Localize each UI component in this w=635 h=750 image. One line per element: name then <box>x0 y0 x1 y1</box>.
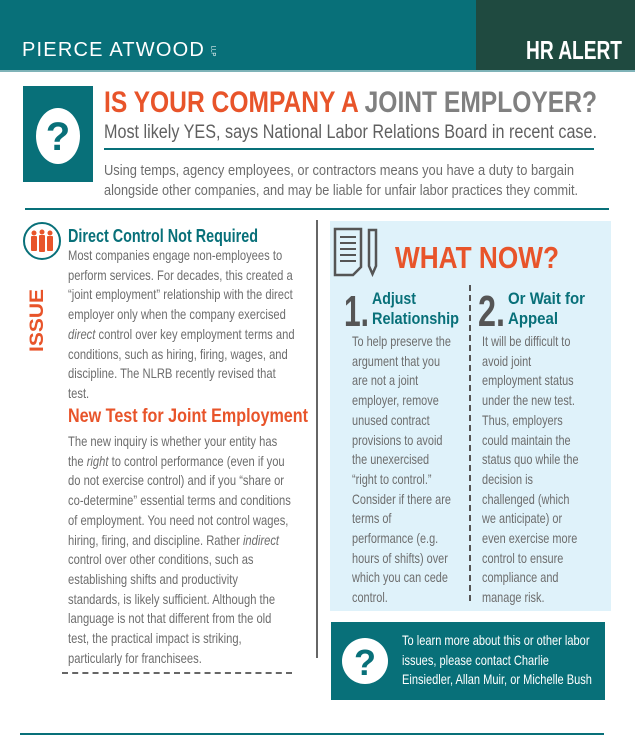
text: step 1: To help preserve the <box>352 333 451 349</box>
title <box>104 86 597 143</box>
icon: document and pen <box>334 228 378 277</box>
text: new test: standards, is likely sufficient. Although the <box>68 591 275 607</box>
text: direct control: employer only when the company exercised <box>68 306 286 322</box>
text: step 1: terms of <box>352 510 391 526</box>
text: new test: control over other conditions, such as <box>68 551 254 567</box>
text: step 1 <box>352 333 451 605</box>
text: step 2: Thus, employers <box>482 412 563 428</box>
text: new test: co-determine” essential terms and conditions <box>68 492 291 508</box>
callout: contact: To learn more about this or other labor <box>402 632 590 648</box>
text: new test <box>68 433 291 666</box>
text: direct control: conditions, such as hiring, firing, wages, and <box>68 346 288 362</box>
text: step 1: which you can cede <box>352 569 448 585</box>
text: new test: particularly for franchisees. <box>68 650 202 666</box>
text: step 1: provisions to avoid <box>352 432 442 448</box>
text: new test: do not exercise control) and if you “share or <box>68 472 284 488</box>
text: new test: establishing shifts and productivity <box>68 571 238 587</box>
text: direct control: discipline. The NLRB recently revised that <box>68 365 276 381</box>
text: step 1: the unexercised <box>352 451 429 467</box>
text: direct control <box>68 247 295 401</box>
step 2 heading: Or Wait for <box>508 289 585 308</box>
text: step 2: decision is <box>482 471 533 487</box>
callout: contact: Einsiedler, Allan Muir, or Michelle Bush <box>402 671 592 687</box>
text: direct control: perform services. For decades, this created a <box>68 267 293 283</box>
text: step 2: compliance and <box>482 569 558 585</box>
text: direct control: test. <box>68 385 89 401</box>
text: step 2: control to ensure <box>482 550 563 566</box>
text: step 2: status quo while the <box>482 451 579 467</box>
text: step 2: could maintain the <box>482 432 571 448</box>
text: step 1: unused contract <box>352 412 430 428</box>
step 2 heading <box>478 287 585 331</box>
icon: question circle <box>342 638 388 684</box>
text: step 1: hours of shifts) over <box>352 550 448 566</box>
text: step 2: It will be difficult to <box>482 333 570 349</box>
text: new test: hiring, firing, and discipline. Rather indirect <box>68 532 279 548</box>
text: step 2: under the new test. <box>482 392 575 408</box>
logo: Pierce Atwood: LLP <box>209 45 215 56</box>
text: step 2: avoid joint <box>482 353 531 369</box>
text: step 1: performance (e.g. <box>352 530 438 546</box>
text: step 2: even exercise more <box>482 530 577 546</box>
text: step 1: are not a joint <box>352 372 418 388</box>
intro text <box>104 162 578 199</box>
step 2 heading: Appeal <box>508 309 558 328</box>
text: step 2: manage risk. <box>482 589 545 605</box>
text: new test: of employment. You need not control wages, <box>68 512 288 528</box>
logo: Pierce Atwood: PIERCE ATWOOD <box>22 39 205 61</box>
icon: question box <box>23 86 93 182</box>
text: step 1: Consider if there are <box>352 491 451 507</box>
text: step 1: employer, remove <box>352 392 439 408</box>
icon: question circle: ? <box>354 642 376 683</box>
text: step 2 <box>482 333 579 605</box>
text: direct control: Most companies engage non-employees to <box>68 247 282 263</box>
text: step 2: employment status <box>482 372 574 388</box>
callout: contact <box>331 622 605 700</box>
step 1 heading: Adjust <box>372 289 416 308</box>
text: new test: test, the practical impact is striking, <box>68 630 242 646</box>
icon: question box: ? <box>46 115 70 159</box>
callout: contact: issues, please contact Charlie <box>402 652 549 668</box>
text: direct control: direct control over key employment terms and <box>68 326 295 342</box>
panel: what now <box>330 221 611 611</box>
text: step 1: “right to control.” <box>352 471 432 487</box>
icon: people circle <box>23 222 61 260</box>
step 1 heading <box>344 287 459 331</box>
text: direct control: “joint employment” relationship with the direct <box>68 286 293 302</box>
HR alert badge <box>476 0 635 70</box>
text: new test: language is not that different from the old <box>68 610 271 626</box>
text: new test: the right to control performance (even if you <box>68 453 285 469</box>
text: new test: The new inquiry is whether your entity has <box>68 433 277 449</box>
step 1 heading: Relationship <box>372 309 459 328</box>
text: step 2: we anticipate) or <box>482 510 562 526</box>
text: step 1: argument that you <box>352 353 440 369</box>
header bar <box>0 0 635 70</box>
text: step 2: challenged (which <box>482 491 569 507</box>
text: step 1: control. <box>352 589 388 605</box>
